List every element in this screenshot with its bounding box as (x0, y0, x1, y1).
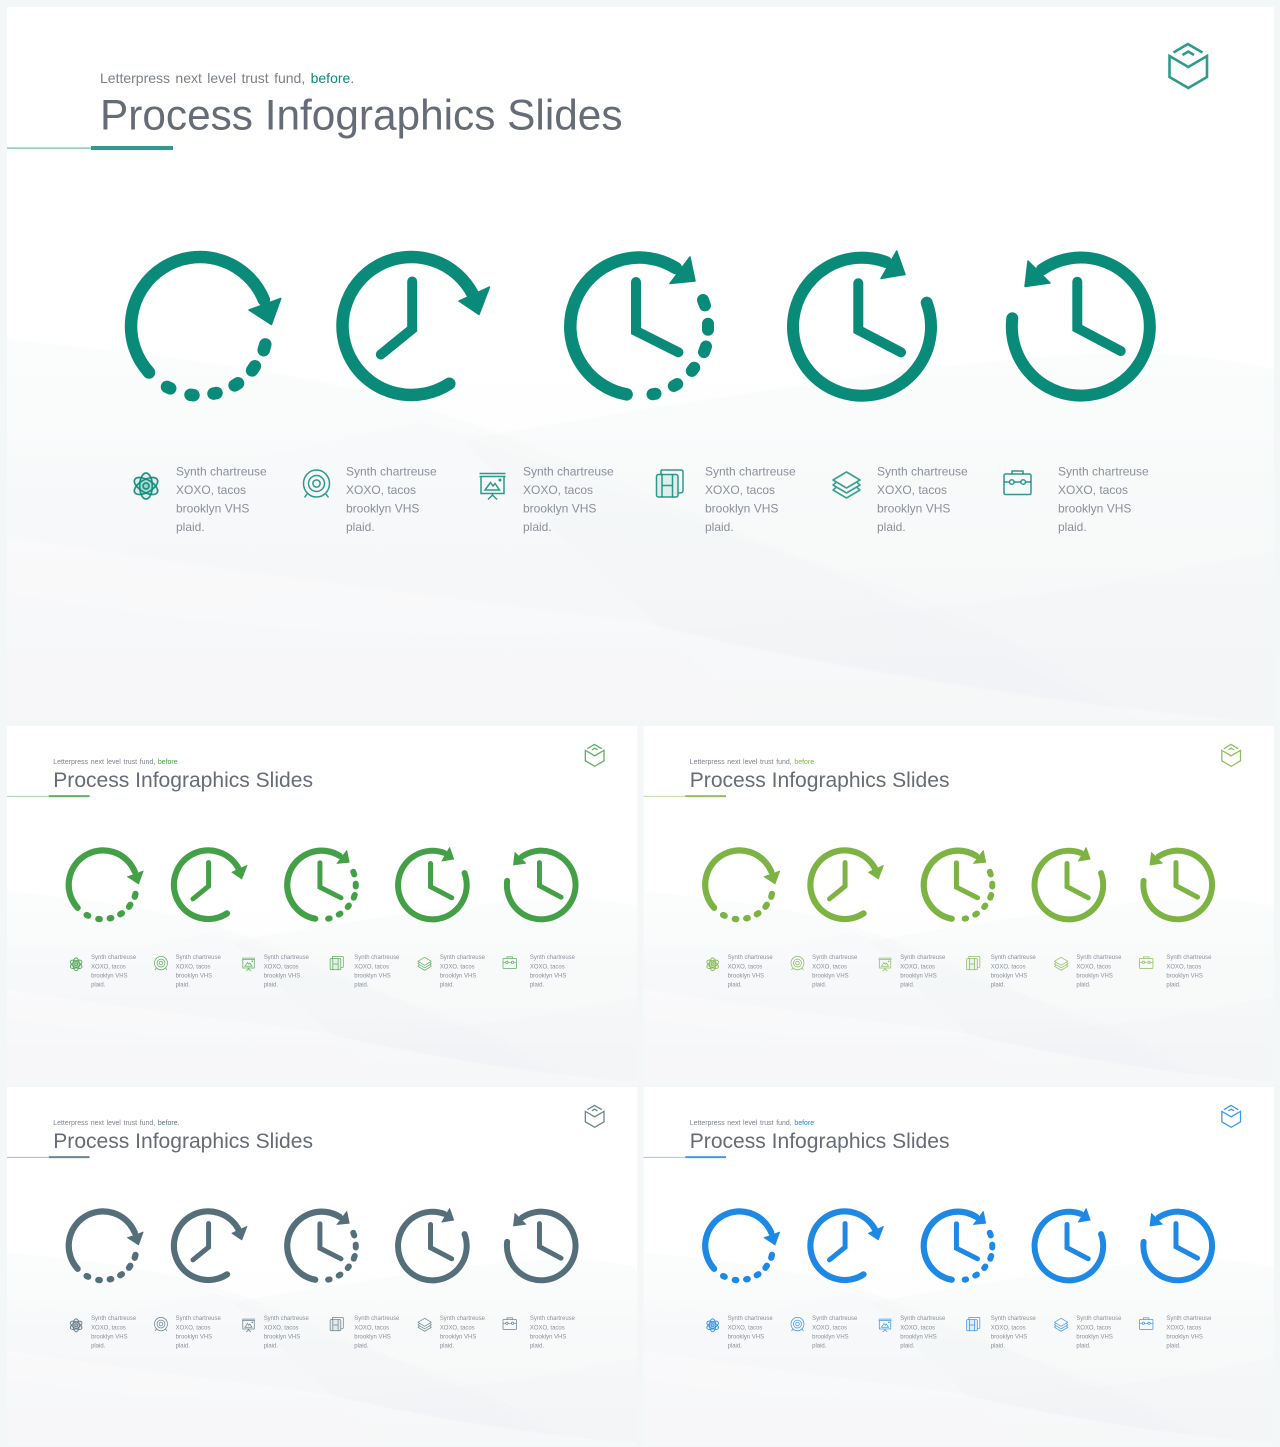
text block 3: brooklyn VHS (523, 502, 596, 516)
text block 5: brooklyn VHS (1076, 1334, 1113, 1340)
icon: film frames (656, 470, 683, 497)
text block 6: XOXO, tacos (1166, 1325, 1201, 1331)
text block 4: XOXO, tacos (705, 483, 775, 497)
icon: cube logo (1170, 44, 1207, 88)
icon: atom (705, 1319, 720, 1332)
clock icons row (69, 847, 576, 919)
text block 4: XOXO, tacos (354, 964, 389, 970)
text block 3: plaid. (900, 983, 915, 989)
title underline (7, 1156, 90, 1158)
text block 4: brooklyn VHS (991, 973, 1027, 979)
icon: atom (705, 958, 720, 971)
icon: briefcase (1004, 471, 1031, 494)
subtitle: Letterpress next level trust fund, before (690, 1120, 814, 1127)
icon: layers (1054, 1318, 1068, 1331)
text block 6: brooklyn VHS (530, 973, 566, 979)
text block 6: plaid. (530, 1344, 544, 1350)
text block 1: XOXO, tacos (728, 964, 762, 970)
text block 2: brooklyn VHS (812, 1334, 849, 1340)
icon: presentation board (879, 1319, 892, 1332)
icon: layers (418, 1318, 431, 1331)
text block 1: XOXO, tacos (728, 1325, 762, 1331)
text block 5: XOXO, tacos (1076, 964, 1111, 970)
icon: presentation board (242, 958, 255, 971)
panel: slate slide (0, 1087, 645, 1447)
text block 3: XOXO, tacos (523, 483, 593, 497)
icon: target (304, 470, 330, 498)
text block 1: Synth chartreuse (728, 1316, 773, 1322)
icon: clock with dotted arrow (570, 257, 708, 394)
title: Process Infographics Slides (100, 92, 622, 138)
icon: cube logo (585, 744, 604, 766)
text block 4: plaid. (991, 1344, 1005, 1350)
subtitle: Letterpress next level trust fund, before (53, 759, 178, 766)
text block 2: Synth chartreuse (176, 955, 221, 961)
text block 1: plaid. (728, 983, 742, 989)
text block 4: Synth chartreuse (354, 955, 400, 961)
text block 3: XOXO, tacos (264, 964, 299, 970)
icon: target (791, 956, 804, 970)
icon: briefcase (1140, 957, 1153, 969)
text block 2: Synth chartreuse (346, 464, 437, 478)
text block 3: XOXO, tacos (900, 1325, 935, 1331)
text block 5: Synth chartreuse (1076, 1316, 1122, 1322)
icon: cube logo (1222, 744, 1240, 766)
title: Process Infographics Slides (690, 1130, 949, 1153)
text block 1: brooklyn VHS (176, 502, 249, 516)
icon: film frames (967, 1317, 980, 1331)
clock icons row (705, 1208, 1212, 1280)
panel: blue slide (635, 1087, 1280, 1447)
icon: dotted cycle arrow (131, 257, 281, 395)
icon: target (155, 1317, 167, 1331)
text block 5: Synth chartreuse (440, 955, 486, 961)
text block 3: plaid. (523, 520, 552, 534)
text block 5: plaid. (440, 1344, 454, 1350)
text block 5: plaid. (1076, 1344, 1091, 1350)
text block 5: XOXO, tacos (440, 1325, 475, 1331)
text block 3: brooklyn VHS (264, 973, 300, 979)
title underline (7, 146, 173, 150)
text block 2: plaid. (346, 520, 375, 534)
title: Process Infographics Slides (53, 1130, 313, 1153)
icon: briefcase (503, 957, 516, 969)
icon: presentation board (480, 474, 506, 500)
text block 4: XOXO, tacos (354, 1325, 389, 1331)
title underline (7, 795, 90, 797)
text block 5: brooklyn VHS (1076, 973, 1113, 979)
icon: cube logo (585, 1105, 604, 1127)
text block 4: XOXO, tacos (991, 1325, 1026, 1331)
text block 1: XOXO, tacos (176, 483, 246, 497)
text block 1: plaid. (91, 983, 106, 989)
text block 6: XOXO, tacos (530, 964, 565, 970)
text block 4: XOXO, tacos (991, 964, 1026, 970)
icon: cube logo (1222, 1105, 1240, 1127)
text block 5: XOXO, tacos (1076, 1325, 1111, 1331)
text block 3: plaid. (900, 1344, 915, 1350)
icon: clock with counterclockwise arrow (1012, 258, 1150, 396)
text block 6: Synth chartreuse (1166, 955, 1212, 961)
panel: light green slide (635, 726, 1280, 1101)
text block 2: XOXO, tacos (176, 1325, 210, 1331)
icon: target (791, 1317, 804, 1331)
text block 6: brooklyn VHS (1166, 973, 1203, 979)
text block 4: Synth chartreuse (991, 955, 1037, 961)
text block 3: XOXO, tacos (900, 964, 935, 970)
text block 2: Synth chartreuse (176, 1316, 221, 1322)
text block 1: XOXO, tacos (91, 1325, 126, 1331)
text block 6: XOXO, tacos (530, 1325, 565, 1331)
icon: layers (418, 957, 431, 970)
subtitle: Letterpress next level trust fund, before. (100, 70, 354, 86)
subtitle: Letterpress next level trust fund, before. (53, 1120, 180, 1127)
text block 5: plaid. (877, 520, 906, 534)
text block 2: XOXO, tacos (176, 964, 210, 970)
text block 2: brooklyn VHS (346, 502, 419, 516)
icon: atom (132, 473, 160, 499)
text block 4: brooklyn VHS (991, 1334, 1027, 1340)
text block 6: XOXO, tacos (1058, 483, 1128, 497)
text block 5: Synth chartreuse (1076, 955, 1122, 961)
text block 5: plaid. (440, 983, 454, 989)
text block 1: Synth chartreuse (91, 955, 137, 961)
text block 3: Synth chartreuse (264, 1316, 310, 1322)
text block 1: brooklyn VHS (728, 973, 764, 979)
subtitle: Letterpress next level trust fund, before (690, 759, 814, 766)
icon: film frames (330, 956, 343, 970)
text block 5: brooklyn VHS (877, 502, 950, 516)
text block 6: Synth chartreuse (1058, 464, 1149, 478)
text block 2: plaid. (176, 983, 190, 989)
icon: target (155, 956, 167, 970)
text block 3: XOXO, tacos (264, 1325, 299, 1331)
text block 6: Synth chartreuse (1166, 1316, 1212, 1322)
text block 4: plaid. (705, 520, 734, 534)
icon: clock with clockwise arrow (793, 251, 931, 396)
text block 3: Synth chartreuse (900, 955, 946, 961)
text block 4: Synth chartreuse (354, 1316, 400, 1322)
icon: atom (69, 1319, 83, 1332)
text block 6: brooklyn VHS (1166, 1334, 1203, 1340)
panel: green slide (0, 726, 645, 1101)
text block 6: plaid. (1166, 1344, 1181, 1350)
icon: film frames (967, 956, 980, 970)
text block 6: XOXO, tacos (1166, 964, 1201, 970)
text block 5: XOXO, tacos (440, 964, 475, 970)
text block 2: XOXO, tacos (346, 483, 416, 497)
text block 4: brooklyn VHS (705, 502, 778, 516)
title underline (644, 795, 726, 797)
text block 2: Synth chartreuse (812, 1316, 858, 1322)
icon: layers (833, 472, 860, 498)
text block 1: brooklyn VHS (91, 973, 128, 979)
text block 3: brooklyn VHS (900, 973, 937, 979)
text block 5: brooklyn VHS (440, 973, 476, 979)
text block 1: brooklyn VHS (728, 1334, 764, 1340)
title: Process Infographics Slides (53, 769, 313, 792)
text block 1: Synth chartreuse (728, 955, 773, 961)
text block 6: brooklyn VHS (1058, 502, 1131, 516)
text block 2: XOXO, tacos (812, 1325, 847, 1331)
text block 4: plaid. (354, 1344, 369, 1350)
text block 1: Synth chartreuse (91, 1316, 137, 1322)
text block 3: Synth chartreuse (523, 464, 614, 478)
text block 1: XOXO, tacos (91, 964, 126, 970)
text block 2: plaid. (812, 983, 827, 989)
text block 1: brooklyn VHS (91, 1334, 128, 1340)
icon: presentation board (242, 1319, 255, 1332)
text block 3: Synth chartreuse (900, 1316, 946, 1322)
text block 1: Synth chartreuse (176, 464, 267, 478)
text block 6: brooklyn VHS (530, 1334, 566, 1340)
icon: clock with partial arrow (342, 257, 490, 395)
text block 6: Synth chartreuse (530, 1316, 576, 1322)
text block 2: XOXO, tacos (812, 964, 847, 970)
text block 4: Synth chartreuse (705, 464, 796, 478)
text block 5: Synth chartreuse (440, 1316, 486, 1322)
text block 5: XOXO, tacos (877, 483, 947, 497)
text block 2: brooklyn VHS (176, 973, 212, 979)
text block 4: plaid. (991, 983, 1005, 989)
text block 6: plaid. (1166, 983, 1181, 989)
icon: presentation board (879, 958, 892, 971)
text block 4: Synth chartreuse (991, 1316, 1037, 1322)
text block 5: Synth chartreuse (877, 464, 968, 478)
text block 5: brooklyn VHS (440, 1334, 476, 1340)
title: Process Infographics Slides (690, 769, 949, 792)
clock icons row (705, 847, 1212, 919)
text block 2: Synth chartreuse (812, 955, 858, 961)
text block 1: plaid. (176, 520, 205, 534)
icon: film frames (330, 1317, 343, 1331)
text block 3: Synth chartreuse (264, 955, 310, 961)
clock icons row (69, 1208, 576, 1280)
text block 3: brooklyn VHS (264, 1334, 300, 1340)
text block 2: brooklyn VHS (812, 973, 849, 979)
text block 4: brooklyn VHS (354, 973, 391, 979)
text block 1: plaid. (91, 1344, 106, 1350)
text block 5: plaid. (1076, 983, 1091, 989)
text block 3: plaid. (264, 1344, 278, 1350)
title underline (644, 1156, 726, 1158)
text block 6: plaid. (530, 983, 544, 989)
text block 2: plaid. (812, 1344, 827, 1350)
text block 3: plaid. (264, 983, 278, 989)
text block 3: brooklyn VHS (900, 1334, 937, 1340)
text block 2: brooklyn VHS (176, 1334, 212, 1340)
text block 6: Synth chartreuse (530, 955, 576, 961)
text block 6: plaid. (1058, 520, 1087, 534)
icon: briefcase (503, 1318, 516, 1330)
icon: atom (69, 958, 83, 971)
icon: layers (1054, 957, 1068, 970)
text block 4: brooklyn VHS (354, 1334, 391, 1340)
panel: main teal slide (0, 7, 1280, 760)
text block 1: plaid. (728, 1344, 742, 1350)
text block 2: plaid. (176, 1344, 190, 1350)
text block 4: plaid. (354, 983, 369, 989)
icon: briefcase (1140, 1318, 1153, 1330)
